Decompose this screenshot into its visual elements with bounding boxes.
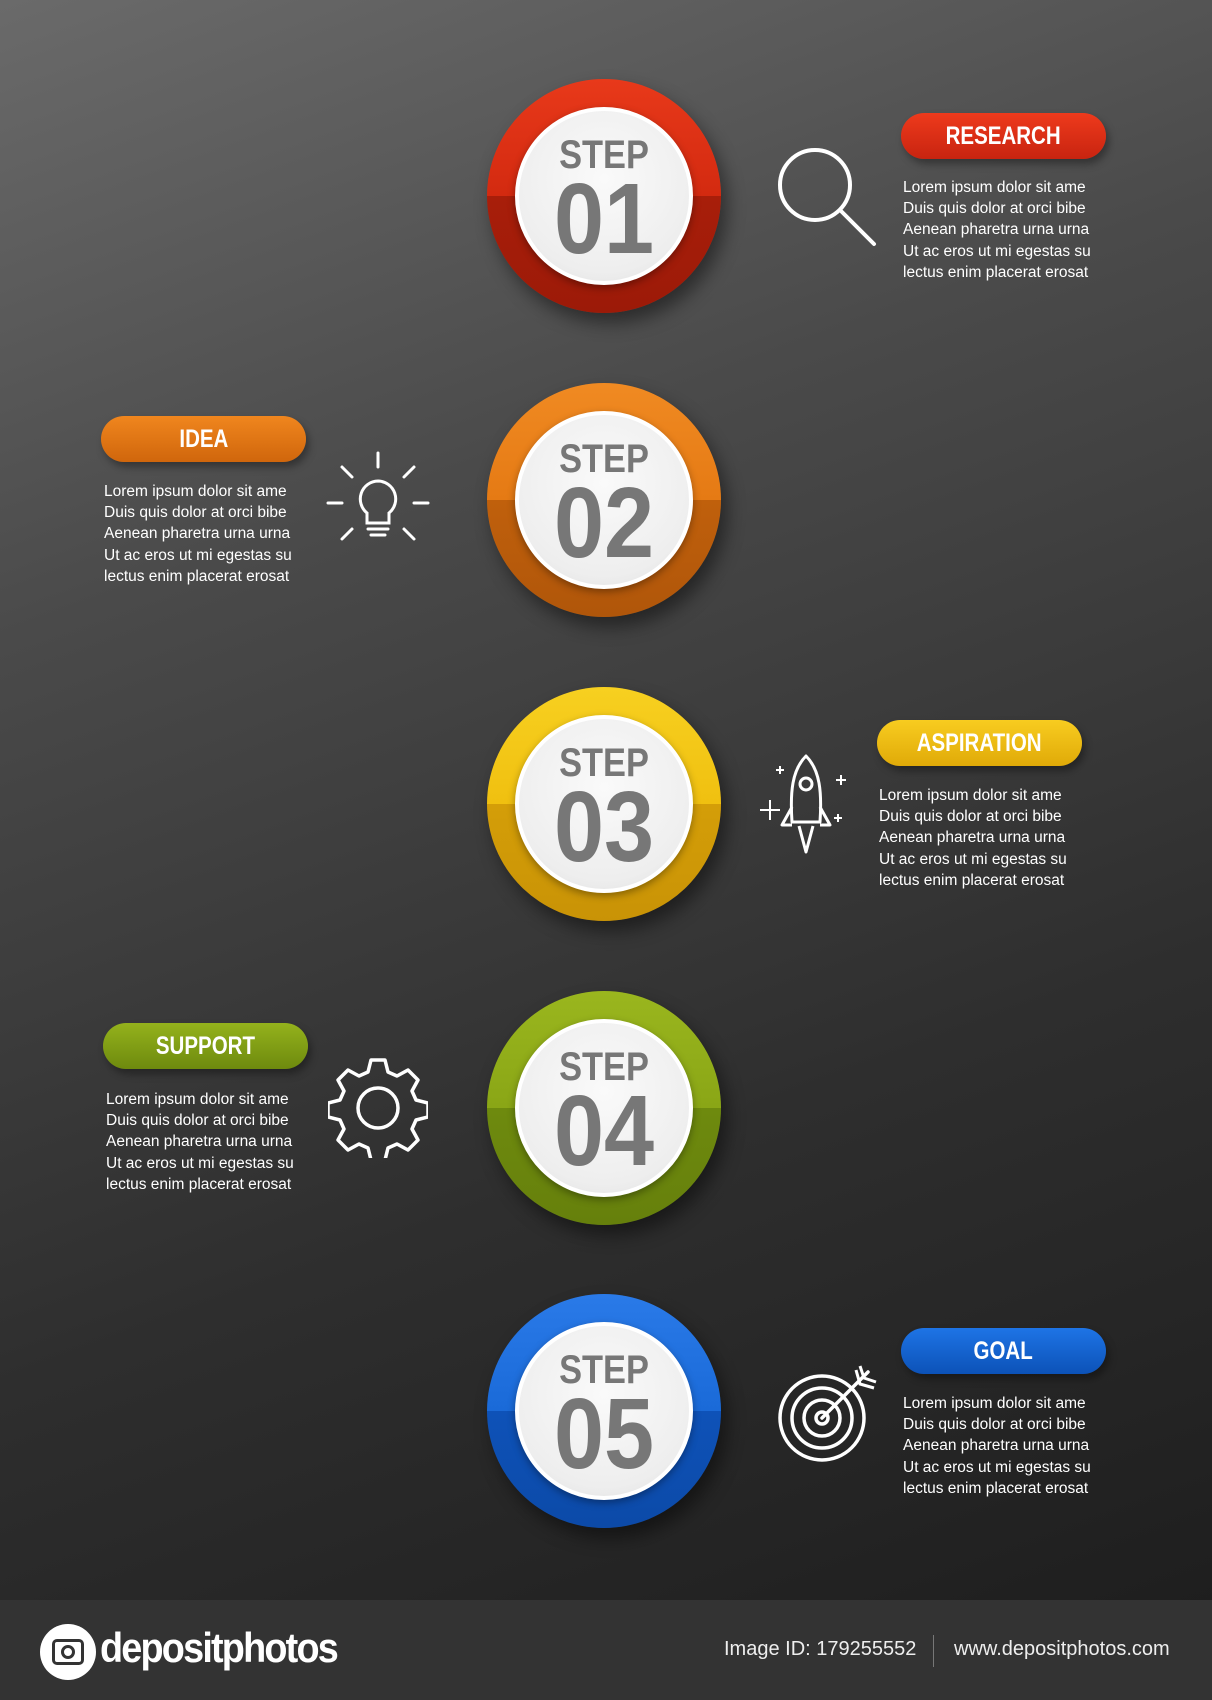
step 03 circle: STEP <box>559 741 649 785</box>
text: aspiration: Aenean pharetra urna urna <box>879 829 1065 846</box>
pill: goal: GOAL <box>974 1337 1033 1365</box>
text: research <box>903 179 1091 281</box>
pill: aspiration: ASPIRATION <box>917 729 1042 757</box>
step 01 circle <box>487 79 721 313</box>
text: idea: Lorem ipsum dolor sit ame <box>104 483 287 500</box>
footer logo <box>40 1624 338 1680</box>
text: idea: Duis quis dolor at orci bibe <box>104 504 287 521</box>
icon: magnifier <box>778 148 876 246</box>
text: idea: lectus enim placerat erosat <box>104 568 289 585</box>
footer url: www.depositphotos.com <box>954 1638 1170 1660</box>
text: idea: Aenean pharetra urna urna <box>104 525 290 542</box>
text: aspiration: Duis quis dolor at orci bibe <box>879 808 1062 825</box>
text: support: Aenean pharetra urna urna <box>106 1133 292 1150</box>
step 02 circle: 02 <box>554 467 654 579</box>
text: idea: Ut ac eros ut mi egestas su <box>104 547 292 564</box>
pill: aspiration <box>877 720 1082 766</box>
icon: target <box>778 1366 876 1462</box>
text: aspiration: lectus enim placerat erosat <box>879 872 1064 889</box>
text: research: Ut ac eros ut mi egestas su <box>903 243 1091 260</box>
step 01 circle: 01 <box>554 163 654 275</box>
pill: support <box>103 1023 308 1069</box>
step 01 circle: STEP <box>559 133 649 177</box>
step 04 circle <box>487 991 721 1225</box>
text: aspiration <box>879 787 1067 889</box>
icon: gear <box>328 1058 428 1158</box>
step 05 circle <box>487 1294 721 1528</box>
footer bar <box>0 1600 1212 1700</box>
text: research: Aenean pharetra urna urna <box>903 221 1089 238</box>
text: aspiration: Lorem ipsum dolor sit ame <box>879 787 1062 804</box>
text: research: lectus enim placerat erosat <box>903 264 1088 281</box>
pill: research: RESEARCH <box>946 122 1061 150</box>
text: research: Lorem ipsum dolor sit ame <box>903 179 1086 196</box>
text: goal: Ut ac eros ut mi egestas su <box>903 1459 1091 1476</box>
step 04 circle: STEP <box>559 1045 649 1089</box>
text: goal <box>903 1395 1091 1497</box>
pill: idea <box>101 416 306 462</box>
text: goal: Lorem ipsum dolor sit ame <box>903 1395 1086 1412</box>
pill: support: SUPPORT <box>156 1032 255 1060</box>
pill: research <box>901 113 1106 159</box>
step 04 circle: 04 <box>554 1075 654 1187</box>
step 03 circle <box>487 687 721 921</box>
step 02 circle: STEP <box>559 437 649 481</box>
text: goal: Aenean pharetra urna urna <box>903 1437 1089 1454</box>
footer logo: depositphotos <box>100 1624 337 1671</box>
text: idea <box>104 483 292 585</box>
text: support: Duis quis dolor at orci bibe <box>106 1112 289 1129</box>
icon: light bulb <box>326 452 430 541</box>
text: support: Lorem ipsum dolor sit ame <box>106 1091 289 1108</box>
text: support: Ut ac eros ut mi egestas su <box>106 1155 294 1172</box>
step 03 circle: 03 <box>554 771 654 883</box>
icon: rocket <box>760 754 846 854</box>
pill: idea: IDEA <box>179 425 228 453</box>
text: goal: lectus enim placerat erosat <box>903 1480 1088 1497</box>
text: aspiration: Ut ac eros ut mi egestas su <box>879 851 1067 868</box>
pill: goal <box>901 1328 1106 1374</box>
text: support: lectus enim placerat erosat <box>106 1176 291 1193</box>
footer image id: Image ID: 179255552 <box>724 1638 916 1660</box>
text: goal: Duis quis dolor at orci bibe <box>903 1416 1086 1433</box>
text: research: Duis quis dolor at orci bibe <box>903 200 1086 217</box>
step 05 circle: STEP <box>559 1348 649 1392</box>
text: support <box>106 1091 294 1193</box>
step 02 circle <box>487 383 721 617</box>
step 05 circle: 05 <box>554 1378 654 1490</box>
